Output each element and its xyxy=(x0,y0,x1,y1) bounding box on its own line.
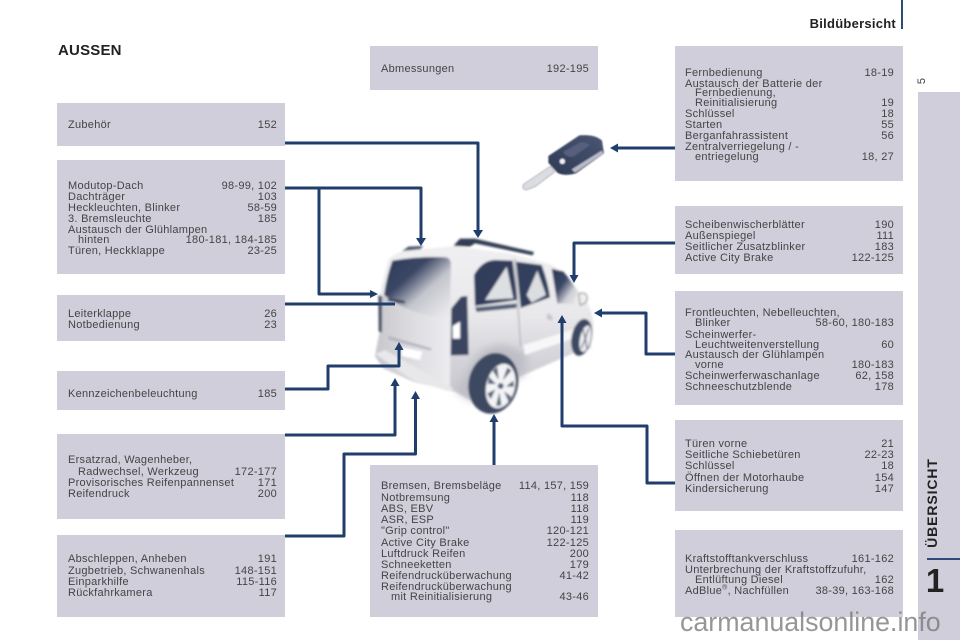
panel: Abschleppen: 115-116 xyxy=(236,576,277,588)
panel: Frontleuchten: Austausch der Glühlampen xyxy=(685,349,824,361)
wheel arch shading xyxy=(457,345,527,402)
door handle xyxy=(547,313,553,320)
panel: Modutop-Dach xyxy=(57,160,285,274)
panel: Fernbedienung: 19 xyxy=(881,97,894,109)
arrow: Fernbedienung to key xyxy=(610,144,675,152)
panel: Fernbedienung: Zentralverriegelung / - xyxy=(685,141,799,153)
panel: Modutop-Dach: Austausch der Glühlampen xyxy=(68,224,207,236)
panel: Modutop-Dach: 180-181, 184-185 xyxy=(186,234,277,246)
illustration: vehicle xyxy=(374,236,594,416)
header accent bar xyxy=(901,0,903,29)
panel: Fernbedienung: Schlüssel xyxy=(685,108,735,120)
header title: Bildübersicht xyxy=(810,16,896,31)
panel: Modutop-Dach: Modutop-Dach xyxy=(68,180,144,192)
panel: Abmessungen xyxy=(370,46,598,90)
car body xyxy=(375,246,593,402)
panel: Scheibenwischerblätter: 190 xyxy=(875,219,894,231)
arrow: Türen to front door xyxy=(558,315,675,483)
panel: Bremsen: 118 xyxy=(571,492,589,504)
panel: Frontleuchten: 180-183 xyxy=(852,359,894,371)
panel: Türen vorne: 21 xyxy=(881,438,894,450)
panel: Bremsen: 118 xyxy=(571,503,589,515)
panel: Fernbedienung: Austausch der Batterie der xyxy=(685,78,823,90)
panel: Türen vorne: 22-23 xyxy=(864,449,894,461)
arrow: Scheibenwischer to windscreen xyxy=(570,243,675,283)
side tab xyxy=(918,92,960,640)
panel: Türen vorne: Schlüssel xyxy=(685,460,735,472)
panel: Bremsen: 179 xyxy=(570,559,589,571)
panel: Türen vorne: Kindersicherung xyxy=(685,483,769,495)
panel: Abschleppen: 148-151 xyxy=(235,565,277,577)
panel: Modutop-Dach: 58-59 xyxy=(247,202,277,214)
arrow: Zubehör to roof xyxy=(285,143,483,238)
panel: Fernbedienung: entriegelung xyxy=(695,151,759,163)
panel: Bremsen xyxy=(370,465,598,617)
side window sliding door xyxy=(516,262,550,308)
panel: Bremsen: Luftdruck Reifen xyxy=(381,548,466,560)
panel: Modutop-Dach: 23-25 xyxy=(247,245,277,257)
panel: Bremsen: Active City Brake xyxy=(381,537,470,549)
panel: Türen vorne: 18 xyxy=(881,460,894,472)
panel: Bremsen: mit Reinitialisierung xyxy=(391,591,492,603)
arrow: Frontleuchten to headlamp xyxy=(594,308,675,354)
panel: Bremsen: Reifendrucküberwachung xyxy=(381,581,512,593)
panel: Scheibenwischerblätter: Seitlicher Zusatzblinker xyxy=(685,241,805,253)
panel: Zubehör: 152 xyxy=(258,119,277,131)
panel: Bremsen: 200 xyxy=(570,548,589,560)
panel: Modutop-Dach: hinten xyxy=(78,234,110,246)
panel: Modutop-Dach: 98-99, 102 xyxy=(222,180,277,192)
panel: Türen vorne: Seitliche Schiebetüren xyxy=(685,449,801,461)
panel: Frontleuchten: 58-60, 180-183 xyxy=(815,317,894,329)
panel: Bremsen: ABS, EBV xyxy=(381,503,433,515)
panel: Frontleuchten: Scheinwerferwaschanlage xyxy=(685,370,820,382)
front wheel xyxy=(568,317,595,358)
panel: Bremsen: Schneeketten xyxy=(381,559,452,571)
panel: Kraftstofftankverschluss: 38-39, 163-168 xyxy=(815,585,894,597)
panel: Frontleuchten: Blinker xyxy=(695,317,731,329)
panel: Abschleppen: 191 xyxy=(258,553,277,565)
panel: Frontleuchten: 60 xyxy=(881,339,894,351)
side window rear xyxy=(474,260,517,306)
panel: Bremsen: "Grip control" xyxy=(381,525,450,537)
panel: Abschleppen: Rückfahrkamera xyxy=(68,587,153,599)
tail light xyxy=(451,296,469,355)
panel: Leiterklappe xyxy=(57,295,285,341)
panel: Bremsen: Reifendrucküberwachung xyxy=(381,570,512,582)
door trim xyxy=(523,328,578,355)
chapter divider xyxy=(927,558,960,560)
panel: Kennzeichenbeleuchtung: 185 xyxy=(258,388,277,400)
panel: Kraftstofftankverschluss xyxy=(675,530,903,617)
panel: Leiterklappe: Notbedienung xyxy=(68,319,140,331)
panel: Leiterklappe: Leiterklappe xyxy=(68,308,131,320)
key fob xyxy=(548,135,604,175)
panel: Ersatzrad: Ersatzrad, Wagenheber, xyxy=(68,454,192,466)
panel: Bremsen: 122-125 xyxy=(547,537,589,549)
chapter label: ÜBERSICHT xyxy=(924,458,940,548)
panel: Modutop-Dach: Dachträger xyxy=(68,191,125,203)
panel: Abschleppen: Einparkhilfe xyxy=(68,576,129,588)
panel: Modutop-Dach: Heckleuchten, Blinker xyxy=(68,202,180,214)
panel: Abmessungen: 192-195 xyxy=(547,63,589,75)
panel: Abschleppen: Zugbetrieb, Schwanenhals xyxy=(68,565,205,577)
panel: Frontleuchten: Leuchtweitenverstellung xyxy=(695,339,819,351)
panel: Ersatzrad xyxy=(57,434,285,519)
panel: Modutop-Dach: Türen, Heckklappe xyxy=(68,245,165,257)
panel: Fernbedienung xyxy=(675,46,903,181)
panel: Bremsen: 114, 157, 159 xyxy=(519,480,589,492)
panel: Scheibenwischerblätter: 111 xyxy=(876,230,894,242)
panel: Fernbedienung: Starten xyxy=(685,119,722,131)
panel: Kennzeichenbeleuchtung: Kennzeichenbeleuchtung xyxy=(68,388,198,400)
panel: Fernbedienung: Berganfahrassistent xyxy=(685,130,788,142)
panel: Frontleuchten: 62, 158 xyxy=(855,370,894,382)
panel: Kraftstofftankverschluss: 162 xyxy=(875,574,894,586)
panel: Türen vorne: Öffnen der Motorhaube xyxy=(685,472,804,484)
wiper xyxy=(388,299,405,303)
panel: Modutop-Dach: 103 xyxy=(258,191,277,203)
panel: Bremsen: 119 xyxy=(571,514,589,526)
panel: Fernbedienung: Fernbedienung xyxy=(685,67,763,79)
panel: Bremsen: ASR, ESP xyxy=(381,514,434,526)
watermark: carmanualsonline.info xyxy=(680,607,941,637)
panel: Frontleuchten xyxy=(675,291,903,405)
panel: Fernbedienung: 55 xyxy=(881,119,894,131)
sill shading xyxy=(475,303,517,312)
panel: Bremsen: Bremsen, Bremsbeläge xyxy=(381,480,502,492)
section heading: AUSSEN xyxy=(58,42,122,59)
page number: 5 xyxy=(916,78,928,84)
panel: Türen vorne: 154 xyxy=(875,472,894,484)
panel: Bremsen: 41-42 xyxy=(559,570,589,582)
panel: Zubehör xyxy=(57,103,285,146)
panel: Scheibenwischerblätter xyxy=(675,206,903,274)
panel: Bremsen: Notbremsung xyxy=(381,492,450,504)
side rear lamp xyxy=(378,295,382,333)
arrow: Leiterklappe to rear window xyxy=(285,302,395,306)
panel: Kraftstofftankverschluss: Entlüftung Diesel xyxy=(695,574,783,586)
panel: Scheibenwischerblätter: Außenspiegel xyxy=(685,230,756,242)
panel: Frontleuchten: Scheinwerfer- xyxy=(685,329,756,341)
arrow: Abschleppen to rear bumper xyxy=(285,391,420,536)
panel: Abschleppen: Abschleppen, Anheben xyxy=(68,553,187,565)
door seam xyxy=(515,258,521,347)
panel: Kraftstofftankverschluss: AdBlue®, Nachfüllen xyxy=(685,584,789,597)
panel: Kennzeichenbeleuchtung xyxy=(57,371,285,410)
panel: Bremsen: 43-46 xyxy=(559,591,589,603)
panel: Kraftstofftankverschluss: Kraftstofftankverschluss xyxy=(685,553,808,565)
panel: Fernbedienung: 18, 27 xyxy=(862,151,894,163)
panel: Abmessungen: Abmessungen xyxy=(381,63,454,75)
panel: Scheibenwischerblätter: Active City Brake xyxy=(685,252,774,264)
rear wheel xyxy=(462,348,525,419)
panel: Frontleuchten: vorne xyxy=(695,359,724,371)
roof rack xyxy=(402,239,534,255)
panel: Modutop-Dach: 3. Bremsleuchte xyxy=(68,213,152,225)
panel: Ersatzrad: Reifendruck xyxy=(68,488,130,500)
mirror xyxy=(579,293,587,305)
panel: Kraftstofftankverschluss: Unterbrechung der Kraftstoffzufuhr, xyxy=(685,564,866,576)
panel: Frontleuchten: Frontleuchten, Nebelleuchten, xyxy=(685,307,840,319)
panel: Modutop-Dach: 185 xyxy=(258,213,277,225)
panel: Ersatzrad: Radwechsel, Werkzeug xyxy=(78,466,199,478)
panel: Abschleppen xyxy=(57,535,285,617)
tailgate panel xyxy=(375,295,451,388)
panel: Ersatzrad: Provisorisches Reifenpannenset xyxy=(68,477,234,489)
arrow: Modutop to rear roof and rear lamp xyxy=(285,188,426,298)
panel: Frontleuchten: Schneeschutzblende xyxy=(685,381,792,393)
chapter number: 1 xyxy=(926,562,944,599)
arrow: Ersatzrad to underbody xyxy=(285,378,400,435)
panel: Leiterklappe: 23 xyxy=(264,319,277,331)
panel: Scheibenwischerblätter: 183 xyxy=(875,241,894,253)
panel: Zubehör: Zubehör xyxy=(68,119,111,131)
bumper light band xyxy=(375,350,453,392)
rear window xyxy=(384,257,451,317)
panel: Ersatzrad: 200 xyxy=(258,488,277,500)
panel: Ersatzrad: 172-177 xyxy=(235,466,277,478)
side window front xyxy=(552,269,577,304)
arrow: Bremsen to rear wheel xyxy=(490,414,498,465)
panel: Scheibenwischerblätter: Scheibenwischerblätter xyxy=(685,219,805,231)
panel: Abschleppen: 117 xyxy=(259,587,277,599)
licence plate xyxy=(402,347,422,360)
panel: Fernbedienung: Reinitialisierung xyxy=(695,97,777,109)
panel: Frontleuchten: 178 xyxy=(875,381,894,393)
panel: Ersatzrad: 171 xyxy=(258,477,277,489)
panel: Scheibenwischerblätter: 122-125 xyxy=(852,252,894,264)
panel: Fernbedienung: Fernbedienung, xyxy=(695,87,776,99)
panel: Bremsen: 120-121 xyxy=(547,525,589,537)
panel: Fernbedienung: 56 xyxy=(881,130,894,142)
panel: Fernbedienung: 18-19 xyxy=(864,67,894,79)
arrow: Kennzeichenbeleuchtung to plate xyxy=(285,342,404,389)
panel: Türen vorne: 147 xyxy=(875,483,894,495)
panel: Türen vorne: Türen vorne xyxy=(685,438,747,450)
key blade xyxy=(523,166,555,190)
panel: Kraftstofftankverschluss: 161-162 xyxy=(852,553,894,565)
panel: Fernbedienung: 18 xyxy=(881,108,894,120)
panel: Türen vorne xyxy=(675,420,903,511)
panel: Leiterklappe: 26 xyxy=(264,308,277,320)
